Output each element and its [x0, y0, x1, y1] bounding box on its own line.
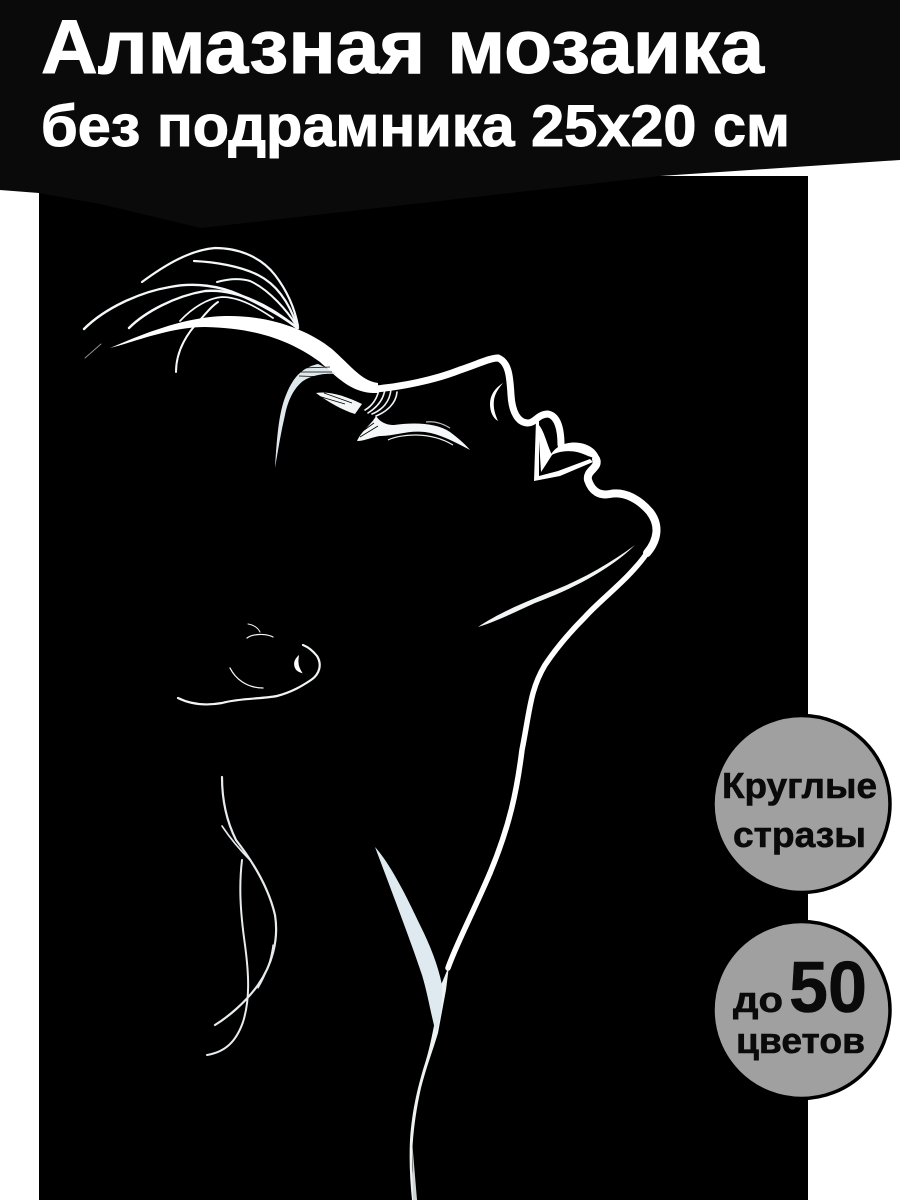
- hair strands above the forehead: [84, 248, 298, 372]
- lower chest line: [412, 1140, 417, 1200]
- header banner: [0, 0, 900, 228]
- chest line forming a V: [375, 847, 442, 1033]
- knot at the bridge of the nose: [365, 388, 397, 416]
- loose hair strands on the neck: [207, 777, 276, 1055]
- badge: round rhinestones: Круглые: [722, 765, 877, 806]
- badge: round rhinestones: стразы: [733, 814, 866, 855]
- subtitle: без подрамника 25х20 см: [41, 94, 790, 159]
- ear: [178, 624, 320, 704]
- nose bridge, nose, lips, chin and neck outline: [375, 358, 656, 968]
- badge: up to 50 colours: 50: [789, 948, 867, 1028]
- panel: black artwork background: [39, 176, 808, 1200]
- eyelash and upper lid: [275, 364, 336, 468]
- jaw line: [478, 545, 635, 627]
- brow line: [110, 316, 378, 393]
- title: Алмазная мозаика: [41, 5, 765, 90]
- neck lower line: [410, 966, 449, 1200]
- artwork: line drawing of a woman's profile: [84, 248, 656, 1200]
- badge: up to 50 colours: [713, 922, 890, 1098]
- nostril: [490, 383, 503, 421]
- badge: round rhinestones: [713, 716, 890, 892]
- closed eye lashes: [316, 393, 470, 450]
- lips: [534, 420, 600, 481]
- badge: up to 50 colours: цветов: [736, 1020, 865, 1061]
- badge: up to 50 colours: до: [733, 979, 783, 1020]
